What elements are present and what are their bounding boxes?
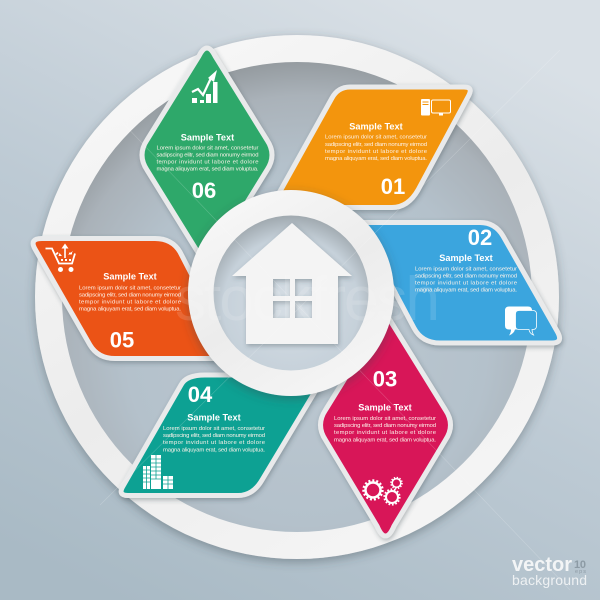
- heading 03: Sample Text: [358, 403, 412, 413]
- heading 04: Sample Text: [187, 413, 241, 423]
- number 04: 04: [188, 382, 213, 407]
- icon: house: [232, 223, 352, 344]
- text block 01: sadipscing elitr, sed diam nonumy eirmod: [325, 142, 427, 148]
- text block 05: magna aliquyam erat, sed diam voluptua.: [79, 307, 181, 313]
- text block 04: Lorem ipsum dolor sit amet, consetetur: [163, 426, 265, 432]
- number 01: 01: [381, 174, 405, 199]
- text block 06: sadipscing elitr, sed diam nonumy eirmod: [156, 152, 258, 158]
- text block 06: Lorem ipsum dolor sit amet, consetetur: [156, 145, 259, 151]
- heading 01: Sample Text: [349, 121, 403, 131]
- logo: vector background: 10: [574, 559, 586, 571]
- text block 04: [163, 426, 266, 453]
- number 05: 05: [110, 328, 134, 353]
- panel 03: pink rhombus: [320, 313, 450, 536]
- text block 01: Lorem ipsum dolor sit amet, consetetur: [325, 135, 427, 141]
- icon: computer: [421, 99, 450, 116]
- logo: vector background: background: [512, 572, 587, 588]
- icon: gears: [364, 478, 402, 505]
- logo: vector background: [512, 554, 587, 588]
- panel 05: red parallelogram: [33, 238, 235, 358]
- text block 04: magna aliquyam erat, sed diam voluptua.: [163, 447, 265, 453]
- panel 04: teal parallelogram: [121, 375, 325, 496]
- text block 01: magna aliquyam erat, sed diam voluptua.: [325, 156, 427, 162]
- text block 03: Lorem ipsum dolor sit amet, consetetur: [334, 416, 436, 422]
- watermark: stockfresh: [175, 265, 440, 334]
- icon: buildings: [143, 455, 173, 489]
- text block 05: sadipscing elitr, sed diam nonumy eirmod: [79, 292, 181, 298]
- number 03: 03: [373, 367, 397, 392]
- panel 01: orange parallelogram: [271, 87, 470, 208]
- outer ring: [35, 35, 559, 559]
- text block 02: tempor invidunt ut labore et dolore: [415, 280, 518, 286]
- panel 06: green rhombus: [142, 48, 272, 267]
- heading 05: Sample Text: [103, 271, 157, 281]
- text block 03: sadipscing elitr, sed diam nonumy eirmod: [334, 423, 436, 429]
- text block 03: [334, 416, 437, 443]
- icon: shopping cart: [46, 244, 75, 272]
- text block 03: magna aliquyam erat, sed diam voluptua.: [334, 437, 436, 443]
- text block 04: sadipscing elitr, sed diam nonumy eirmod: [163, 433, 265, 439]
- text block 04: tempor invidunt ut labore et dolore: [163, 440, 266, 446]
- heading 06: Sample Text: [181, 132, 234, 142]
- text block 06: magna aliquyam erat, sed diam voluptua.: [156, 167, 259, 173]
- text block 05: Lorem ipsum dolor sit amet, consetetur: [79, 285, 181, 291]
- text block 02: magna aliquyam erat, sed diam voluptua.: [415, 288, 517, 294]
- number 02: 02: [468, 225, 492, 250]
- text block 02: Lorem ipsum dolor sit amet, consetetur: [415, 266, 517, 272]
- icon: growth chart: [192, 70, 218, 103]
- text block 03: tempor invidunt ut labore et dolore: [334, 430, 437, 436]
- text block 06: tempor invidunt ut labore et dolore: [156, 160, 259, 166]
- panel 02: blue parallelogram: [358, 222, 560, 343]
- text block 02: [415, 266, 518, 294]
- icon: speech bubbles: [505, 306, 536, 336]
- central ring: [188, 190, 394, 396]
- heading 02: Sample Text: [439, 253, 493, 263]
- logo: vector background: vector: [512, 554, 572, 576]
- text block 02: sadipscing elitr, sed diam nonumy eirmod: [415, 273, 517, 279]
- text block 06: [156, 145, 259, 173]
- text block 05: tempor invidunt ut labore et dolore: [79, 300, 182, 306]
- text block 01: [325, 135, 428, 162]
- text block 05: [79, 285, 182, 313]
- text block 01: tempor invidunt ut labore et dolore: [325, 149, 428, 155]
- number 06: 06: [192, 178, 216, 203]
- logo: vector background: eps: [575, 569, 586, 575]
